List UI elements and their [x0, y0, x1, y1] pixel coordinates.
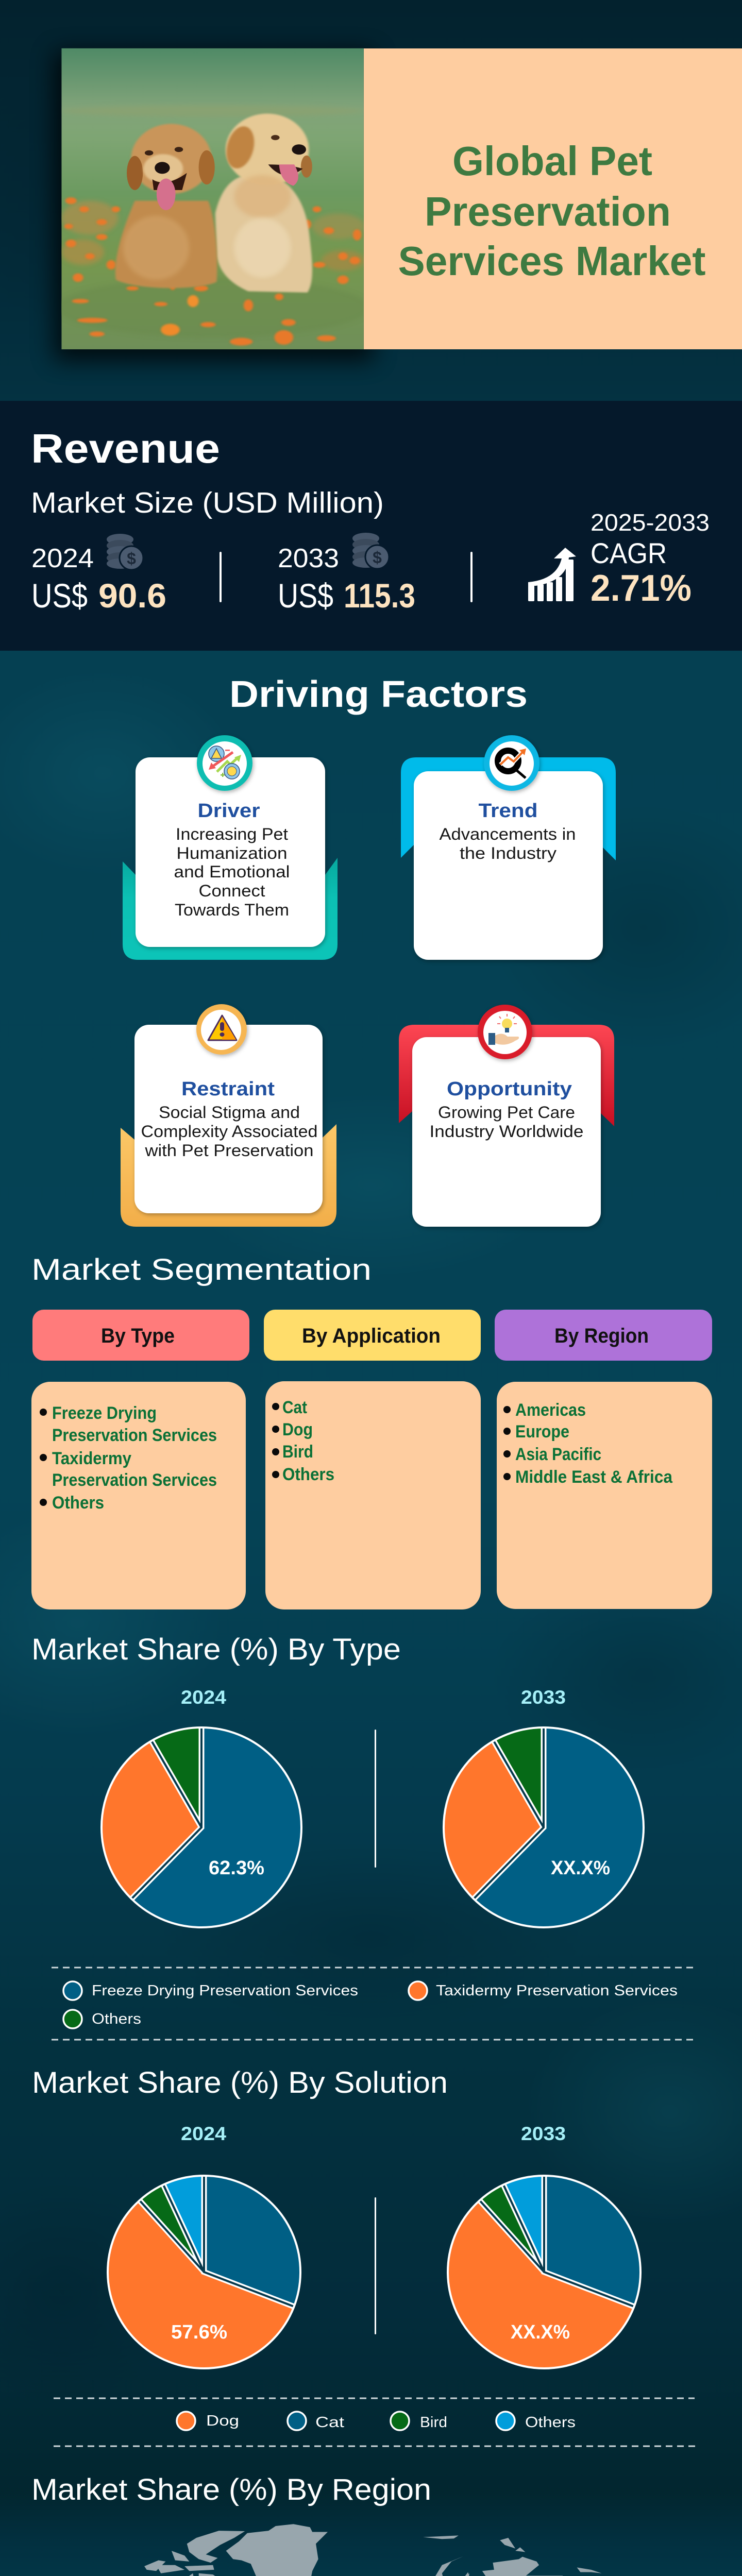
restraint text: with Pet Preservation: [144, 1141, 313, 1160]
pie chart: type 2033: [443, 1727, 644, 1928]
2033 revenue value: US$: [278, 577, 333, 615]
list panel: type: [31, 1382, 246, 1609]
legend: solution: [54, 2398, 699, 2446]
2024 revenue value: 90.6: [98, 577, 166, 615]
pie chart: solution 2024: [107, 2175, 301, 2369]
list panel: region: Middle East & Africa: [515, 1467, 673, 1487]
legend: solution: Dog: [206, 2413, 239, 2429]
restraint text: [141, 1103, 317, 1160]
opportunity text: Industry Worldwide: [430, 1122, 583, 1141]
pie chart: solution 2024: 57.6%: [171, 2321, 227, 2343]
divider: [220, 552, 222, 602]
2024 revenue value: 2024: [31, 544, 94, 573]
divider between type pies: [375, 1730, 376, 1868]
CAGR value: 2.71%: [591, 568, 692, 609]
legend: solution: Cat: [315, 2414, 344, 2431]
year label 2024: 2024: [181, 1687, 226, 1708]
trend text: Advancements in: [439, 825, 576, 843]
title panel: [364, 48, 742, 349]
list panel: type: Taxidermy: [52, 1449, 131, 1468]
restraint text: Complexity Associated: [141, 1122, 317, 1141]
first puppy: [115, 124, 217, 288]
header: by application: [264, 1310, 481, 1361]
card: trend: [401, 735, 616, 960]
revenue band: [0, 401, 742, 651]
icon: trend magnifier: [484, 735, 539, 791]
2033 revenue value: [278, 544, 415, 615]
list panel: type: Preservation Services: [52, 1470, 217, 1490]
icon: coins 2024: $: [127, 549, 136, 568]
eurasia: [333, 2557, 667, 2576]
list panel: application: Others: [282, 1465, 334, 1484]
legend: type: Taxidermy Preservation Services: [436, 1982, 678, 1999]
driver text: Increasing Pet: [176, 825, 288, 843]
pie chart: solution 2033: [447, 2175, 641, 2369]
CAGR value: [591, 509, 710, 609]
2033 revenue value: 115.3: [344, 577, 415, 615]
legend: type: Others: [92, 2011, 141, 2027]
pie chart: type 2033: XX.X%: [551, 1857, 610, 1879]
market share by region heading: Market Share (%) By Region: [31, 2473, 431, 2506]
header: by type: By Type: [101, 1325, 175, 1347]
market segmentation heading: Market Segmentation: [31, 1253, 372, 1286]
icon: warning triangle: [196, 1004, 247, 1055]
trend text: the Industry: [460, 844, 556, 862]
CAGR value: 2025-2033: [591, 509, 710, 536]
asian and pacific islands: [423, 2535, 647, 2576]
restraint text: Social Stigma and: [159, 1103, 300, 1122]
list panel: application: Dog: [282, 1420, 313, 1439]
icon: coins 2024: [107, 534, 143, 570]
list panel: region: [497, 1382, 712, 1609]
revenue heading: Revenue: [31, 426, 220, 471]
legend: type: Freeze Drying Preservation Services: [92, 1982, 358, 1999]
list panel: application: [265, 1381, 481, 1609]
list panel: region: Asia Pacific: [515, 1445, 601, 1464]
header: by type: [32, 1310, 249, 1361]
driver text: [174, 825, 290, 919]
header photo of two puppies: [54, 48, 374, 361]
header: by region: By Region: [554, 1325, 649, 1347]
icon: coins 2033: [352, 533, 389, 569]
opportunity title: Opportunity: [447, 1078, 572, 1100]
icon: driver gears and arrows: [197, 735, 252, 791]
driver title: Driver: [198, 800, 260, 822]
header: by region: [495, 1310, 712, 1361]
pie chart: type 2024: 62.3%: [209, 1857, 264, 1879]
2024 revenue value: [31, 544, 166, 615]
list panel: application: Cat: [282, 1398, 307, 1417]
driver text: Towards Them: [175, 901, 289, 919]
market share by type heading: Market Share (%) By Type: [31, 1633, 401, 1666]
second puppy: [215, 114, 312, 293]
legend: solution: Bird: [420, 2414, 447, 2431]
year label 2024: 2024: [181, 2123, 226, 2144]
divider between solution pies: [375, 2197, 376, 2334]
icon: coins 2033: $: [373, 548, 382, 567]
legend: type: [52, 1968, 695, 2040]
title panel: Services Market: [398, 238, 706, 284]
greenland: [226, 2524, 328, 2576]
2024 revenue value: US$: [31, 577, 88, 615]
2033 revenue value: 2033: [278, 544, 339, 573]
icon: growth chart: [528, 548, 576, 601]
driver text: Connect: [199, 882, 265, 900]
title panel: Preservation: [425, 189, 671, 234]
CAGR value: CAGR: [591, 537, 667, 569]
pie chart: type 2024: [101, 1727, 302, 1928]
header: by application: By Application: [302, 1325, 441, 1347]
list panel: type: Others: [52, 1493, 104, 1513]
pie chart: solution 2033: XX.X%: [511, 2321, 570, 2343]
eastern hemisphere: [319, 2535, 667, 2576]
trend text: [439, 825, 576, 862]
list panel: application: Bird: [282, 1442, 313, 1462]
market size label: Market Size (USD Million): [31, 486, 384, 519]
card: opportunity: [399, 1005, 614, 1227]
restraint title: Restraint: [181, 1078, 275, 1100]
card: restraint: [121, 1004, 336, 1227]
list panel: type: Freeze Drying: [52, 1403, 157, 1423]
list panel: type: Preservation Services: [52, 1426, 217, 1445]
divider: [470, 552, 473, 602]
opportunity text: [430, 1103, 583, 1141]
driver text: Humanization: [176, 844, 288, 862]
world map: [71, 2524, 667, 2576]
market share by solution heading: Market Share (%) By Solution: [32, 2066, 448, 2099]
icon: light bulb in hand: [478, 1005, 532, 1059]
driving factors heading: Driving Factors: [229, 674, 528, 715]
list panel: region: Europe: [515, 1422, 569, 1442]
title panel: Global Pet: [452, 138, 652, 184]
canadian arctic islands: [141, 2531, 245, 2576]
opportunity text: Growing Pet Care: [438, 1103, 575, 1122]
year label 2033: 2033: [521, 2123, 566, 2144]
list panel: region: Americas: [515, 1400, 586, 1420]
trend title: Trend: [478, 800, 538, 822]
year label 2033: 2033: [521, 1687, 566, 1708]
card: driver: [123, 735, 338, 960]
driver text: and Emotional: [174, 862, 290, 881]
legend: solution: Others: [525, 2414, 576, 2431]
